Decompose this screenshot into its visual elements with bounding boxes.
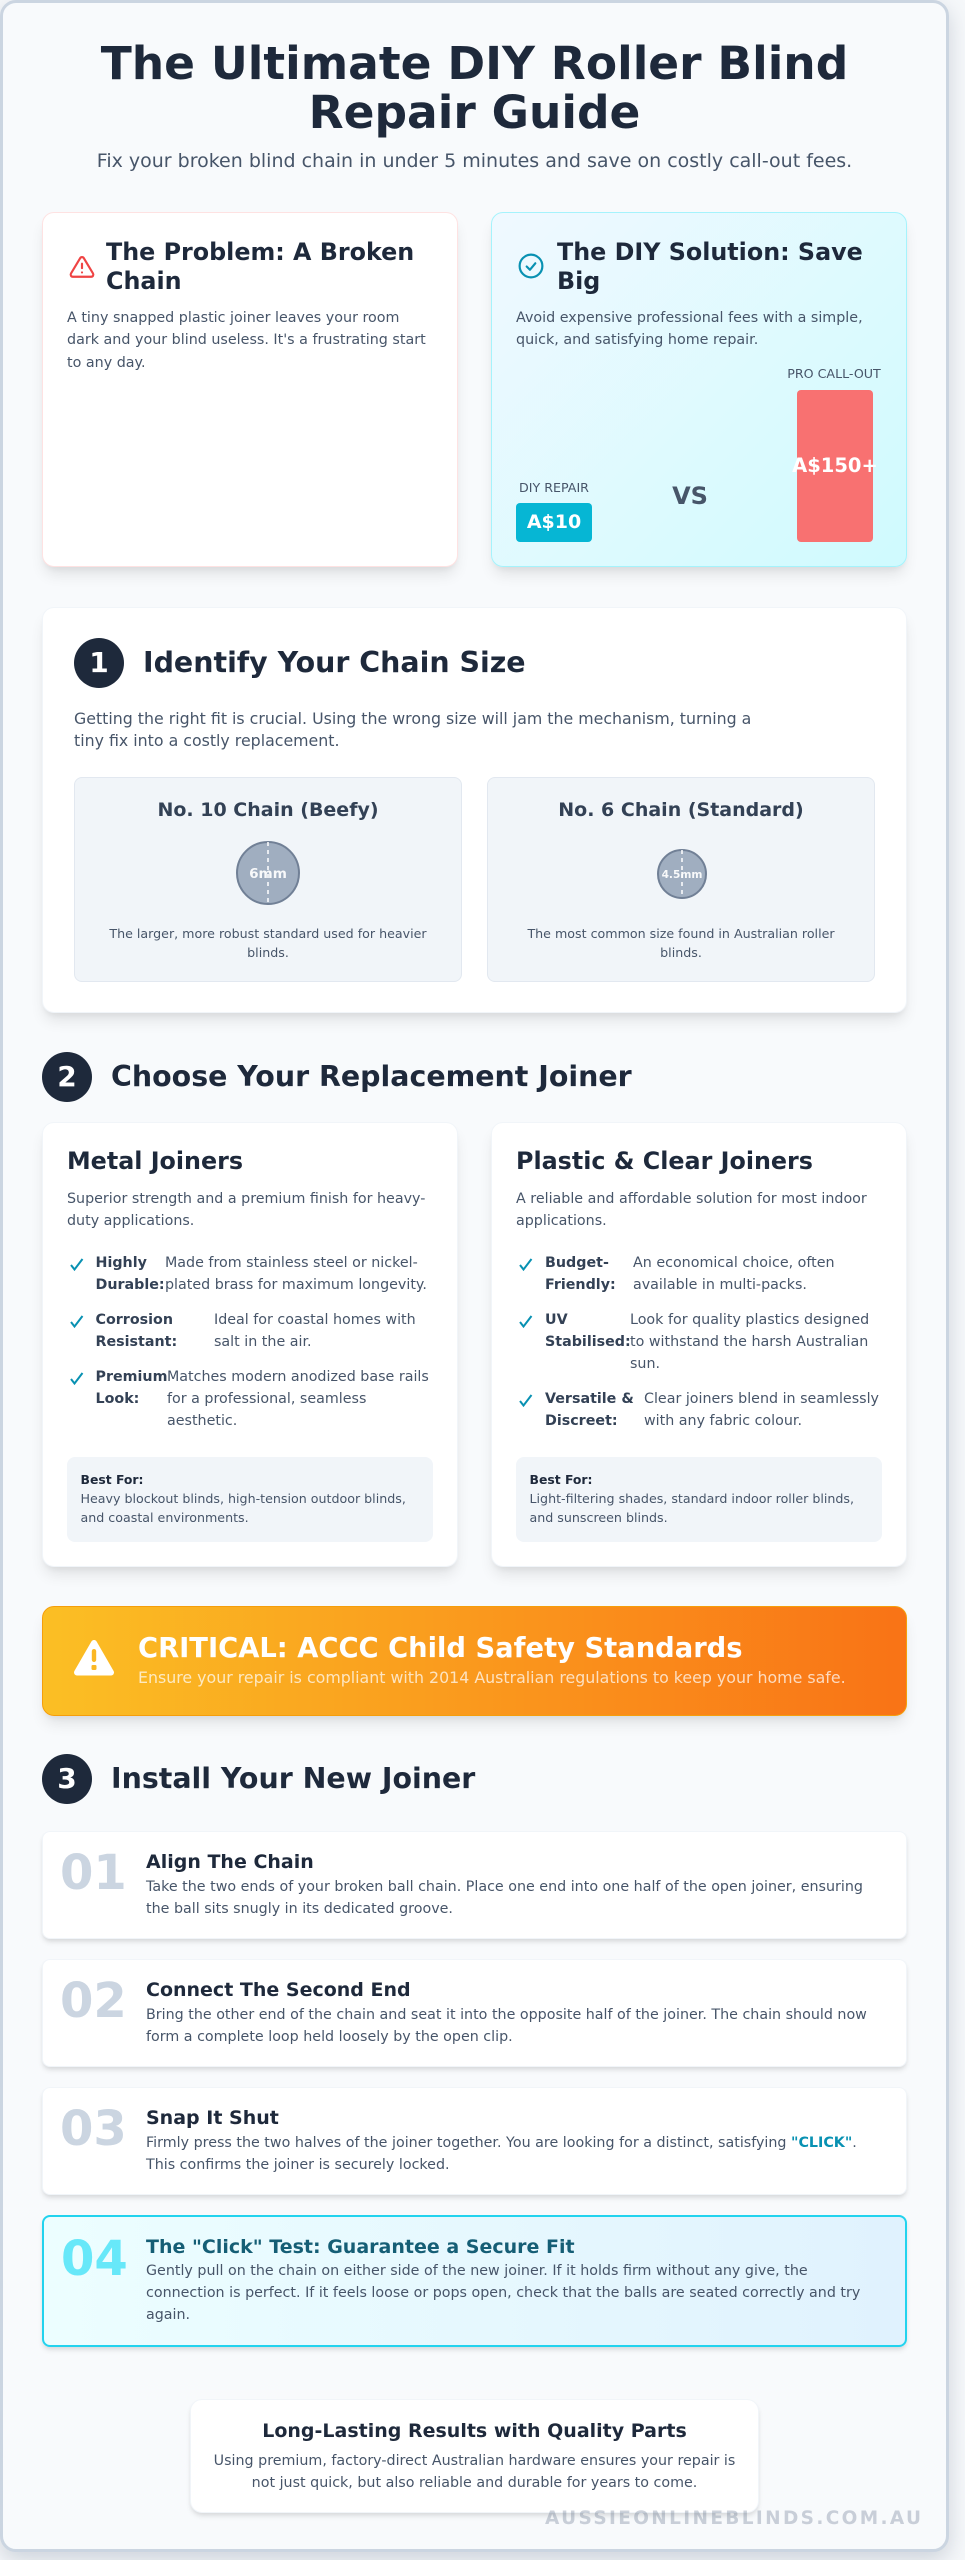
benefit: highly durable: Durable: bbox=[96, 1277, 165, 1293]
heading: align the chain: Align The Chain bbox=[146, 1851, 314, 1873]
icon: 4.5mm ball diagram: 4.5mm bbox=[662, 869, 702, 881]
heading: identify your chain size: Identify Your Chain Size bbox=[143, 646, 526, 679]
list: plastic benefits bbox=[519, 1255, 879, 1429]
benefit: uv stabilised: Stabilised: bbox=[545, 1334, 631, 1350]
benefit: uv stabilised: UV bbox=[545, 1312, 568, 1328]
benefit: highly durable: Highly bbox=[96, 1255, 147, 1271]
text: click test details: connection is perfect. If it feels loose or pops open, check that the balls are seated correctly and try bbox=[146, 2285, 860, 2301]
text: no. 10 description: The larger, more robust standard used for heavier bbox=[109, 926, 427, 941]
label: pro call-out: PRO CALL-OUT bbox=[787, 366, 881, 381]
text: plastic uses: Light-filtering shades, standard indoor roller blinds, bbox=[530, 1491, 854, 1506]
icon: check bbox=[70, 1315, 84, 1328]
number: 02: 02 bbox=[60, 1973, 127, 2029]
badge: number 3 bbox=[42, 1754, 92, 1804]
title: Repair Guide bbox=[309, 86, 640, 139]
text: compliance note: Ensure your repair is compliant with 2014 Australian regulations to keep your home safe. bbox=[138, 1668, 846, 1687]
label: DIY repair: DIY REPAIR bbox=[519, 480, 589, 495]
benefit: highly durable bbox=[96, 1255, 165, 1293]
text: metal intro bbox=[67, 1191, 425, 1229]
text: no. 10 description: blinds. bbox=[247, 945, 289, 960]
benefit: versatile and discreet bbox=[545, 1391, 634, 1429]
number: 04: 04 bbox=[61, 2231, 128, 2287]
heading: the problem: The Problem: A Broken bbox=[106, 238, 414, 266]
text: snap details: This confirms the joiner is securely locked. bbox=[146, 2157, 450, 2173]
benefit: budget friendly: Budget- bbox=[545, 1255, 609, 1271]
benefit: corrosion resistant: Corrosion bbox=[96, 1312, 173, 1328]
panel: metal joiners bbox=[42, 1122, 458, 1567]
text: corrosion detail: salt in the air. bbox=[214, 1334, 312, 1350]
heading: long-lasting results: Long-Lasting Results with Quality Parts bbox=[262, 2420, 687, 2442]
text: no. 6 description bbox=[527, 926, 835, 960]
icon: safety warning bbox=[74, 1640, 114, 1676]
heading: snap it shut: Snap It Shut bbox=[146, 2107, 279, 2129]
panel: number 6 chain bbox=[487, 777, 875, 982]
heading: no. 10 chain: No. 10 Chain (Beefy) bbox=[157, 799, 379, 821]
heading: ACCC child safety standards: CRITICAL: ACCC Child Safety Standards bbox=[138, 1633, 743, 1664]
text: snap details: Firmly press the two halves of the joiner together. You are looking for a distinct, satisfying "CLICK". bbox=[146, 2135, 857, 2151]
text: problem description: dark and your blind useless. It's a frustrating start bbox=[67, 332, 426, 348]
benefit: corrosion resistant bbox=[96, 1312, 177, 1350]
text: highly durable detail bbox=[165, 1255, 427, 1293]
text: align details: the ball sits snugly in its dedicated groove. bbox=[146, 1901, 453, 1917]
text: budget detail bbox=[633, 1255, 835, 1293]
icon: check bbox=[70, 1372, 84, 1385]
callout: plastic best for bbox=[516, 1457, 882, 1542]
bar: pro call-out cost: A$150+ bbox=[792, 454, 878, 477]
text: solution description: quick, and satisfying home repair. bbox=[516, 332, 758, 348]
text: solution description bbox=[516, 310, 863, 348]
text: no. 6 description: The most common size found in Australian roller bbox=[527, 926, 835, 941]
heading: the solution bbox=[557, 238, 863, 294]
text: snap details bbox=[146, 2132, 857, 2176]
heading: the problem bbox=[106, 238, 414, 294]
text: plastic uses bbox=[530, 1491, 854, 1525]
heading: click test: The "Click" Test: Guarantee a Secure Fit bbox=[146, 2236, 575, 2258]
watermark: website: AUSSIEONLINEBLINDS.COM.AU bbox=[545, 2508, 923, 2529]
icon: 6mm ball diagram bbox=[236, 841, 300, 905]
text: footer detail bbox=[191, 2450, 758, 2494]
text: plastic intro: A reliable and affordable solution for most indoor bbox=[516, 1191, 867, 1207]
label: best for: Best For: bbox=[80, 1472, 144, 1487]
icon: check bbox=[70, 1258, 84, 1271]
text: versatile detail: with any fabric colour. bbox=[644, 1413, 802, 1429]
number: 03: 03 bbox=[60, 2101, 127, 2157]
text: click test details: Gently pull on the chain on either side of the new joiner. If it holds firm without any give, the bbox=[146, 2263, 808, 2279]
text: click test details bbox=[146, 2260, 860, 2327]
panel: install step 02 bbox=[42, 1959, 907, 2067]
benefit: budget friendly: Friendly: bbox=[545, 1277, 616, 1293]
text: uv detail: Look for quality plastics designed bbox=[630, 1312, 869, 1328]
icon: check bbox=[519, 1258, 532, 1271]
text: metal uses: Heavy blockout blinds, high-tension outdoor blinds, bbox=[80, 1491, 406, 1506]
heading: choose replacement joiner: Choose Your Replacement Joiner bbox=[111, 1060, 632, 1093]
panel: install step 04 click test bbox=[42, 2215, 907, 2347]
text: problem description: A tiny snapped plastic joiner leaves your room bbox=[67, 310, 399, 326]
text: uv detail bbox=[630, 1312, 869, 1372]
text: no. 6 description: blinds. bbox=[660, 945, 702, 960]
text: uv detail: to withstand the harsh Australian bbox=[630, 1334, 868, 1350]
text: solution description: Avoid expensive professional fees with a simple, bbox=[516, 310, 863, 326]
panel: install step 01 bbox=[42, 1831, 907, 1939]
heading: the problem: Chain bbox=[106, 266, 182, 294]
panel: the DIY solution bbox=[491, 212, 907, 567]
bar: DIY repair cost bbox=[516, 503, 592, 542]
text: corrosion detail: Ideal for coastal homes with bbox=[214, 1312, 416, 1328]
text: versatile detail: Clear joiners blend in seamlessly bbox=[644, 1391, 879, 1407]
heading: the solution: The DIY Solution: Save bbox=[557, 238, 863, 266]
icon: 6mm ball diagram: 6mm bbox=[249, 866, 287, 882]
text: premium look detail: Matches modern anodized base rails bbox=[167, 1369, 429, 1385]
heading: install your new joiner: Install Your New Joiner bbox=[111, 1762, 475, 1795]
benefit: versatile and discreet: Versatile & bbox=[545, 1391, 634, 1407]
callout: metal best for bbox=[67, 1457, 433, 1542]
text: versatile detail bbox=[644, 1391, 879, 1429]
text: uv detail: sun. bbox=[630, 1356, 660, 1372]
benefit: versatile and discreet: Discreet: bbox=[545, 1413, 618, 1429]
text: chain size intro: tiny fix into a costly replacement. bbox=[74, 731, 340, 750]
bar: pro call-out cost bbox=[797, 390, 873, 542]
benefit: premium look: Premium bbox=[96, 1369, 167, 1385]
text: connect details: form a complete loop held loosely by the open clip. bbox=[146, 2029, 513, 2045]
text: premium look detail bbox=[167, 1369, 429, 1429]
text: metal intro: duty applications. bbox=[67, 1213, 194, 1229]
icon: warning triangle bbox=[70, 256, 94, 278]
text: no. 10 description bbox=[109, 926, 427, 960]
badge: number 3: 3 bbox=[57, 1762, 77, 1795]
text: metal intro: Superior strength and a premium finish for heavy- bbox=[67, 1191, 425, 1207]
number: 01: 01 bbox=[60, 1845, 127, 1901]
label: best for: Best For: bbox=[530, 1472, 592, 1487]
text: budget detail: available in multi-packs. bbox=[633, 1277, 807, 1293]
text: plastic intro bbox=[516, 1191, 867, 1229]
text: highly durable detail: plated brass for maximum longevity. bbox=[165, 1277, 427, 1293]
text: chain size intro bbox=[74, 709, 751, 750]
text: corrosion detail bbox=[214, 1312, 416, 1350]
list: metal benefits bbox=[70, 1255, 429, 1429]
icon: check bbox=[519, 1315, 532, 1328]
badge: number 1 bbox=[74, 638, 124, 688]
panel: footer quality note bbox=[190, 2399, 759, 2513]
benefit: corrosion resistant: Resistant: bbox=[96, 1334, 177, 1350]
heading: metal joiners: Metal Joiners bbox=[67, 1147, 243, 1175]
icon: check circle bbox=[518, 254, 544, 278]
text: align details bbox=[146, 1879, 863, 1917]
heading: plastic and clear joiners: Plastic & Clear Joiners bbox=[516, 1147, 813, 1175]
text: align details: Take the two ends of your broken ball chain. Place one end into one half of the open joiner, ensuring bbox=[146, 1879, 863, 1895]
benefit: premium look: Look: bbox=[96, 1391, 139, 1407]
icon: check bbox=[519, 1394, 532, 1407]
text: problem description: to any day. bbox=[67, 355, 146, 371]
subtitle: Fix your broken blind chain in under 5 minutes and save on costly call-out fees. bbox=[97, 150, 852, 172]
badge: number 2 bbox=[42, 1052, 92, 1102]
benefit: premium look bbox=[96, 1369, 167, 1407]
panel: number 10 chain bbox=[74, 777, 462, 982]
heading: connect the second end: Connect The Second End bbox=[146, 1979, 411, 2001]
text: metal uses: and coastal environments. bbox=[80, 1510, 249, 1525]
text: chain size intro: Getting the right fit is crucial. Using the wrong size will jam the mechanism, turning a bbox=[74, 709, 751, 728]
text: metal uses bbox=[80, 1491, 406, 1525]
text: click test details: again. bbox=[146, 2307, 190, 2323]
text: plastic intro: applications. bbox=[516, 1213, 607, 1229]
badge: number 1: 1 bbox=[89, 646, 109, 679]
callout: child safety alert bbox=[42, 1606, 907, 1716]
bar: DIY repair cost: A$10 bbox=[527, 511, 581, 533]
icon: 4.5mm ball diagram bbox=[657, 849, 707, 899]
heading: the solution: Big bbox=[557, 266, 600, 294]
benefit: uv stabilised bbox=[545, 1312, 631, 1350]
heading: no. 6 chain: No. 6 Chain (Standard) bbox=[558, 799, 804, 821]
panel: install step 03 bbox=[42, 2087, 907, 2195]
panel: plastic and clear joiners bbox=[491, 1122, 907, 1567]
panel: the problem bbox=[42, 212, 458, 567]
text: connect details bbox=[146, 2007, 867, 2045]
text: footer detail: not just quick, but also reliable and durable for years to come. bbox=[252, 2475, 697, 2491]
text: highly durable detail: Made from stainless steel or nickel- bbox=[165, 1255, 418, 1271]
text: budget detail: An economical choice, often bbox=[633, 1255, 835, 1271]
text: premium look detail: aesthetic. bbox=[167, 1413, 237, 1429]
title bbox=[100, 37, 848, 139]
benefit: budget friendly bbox=[545, 1255, 616, 1293]
text: versus: VS bbox=[672, 482, 708, 510]
text: plastic uses: and sunscreen blinds. bbox=[530, 1510, 668, 1525]
text: premium look detail: for a professional, seamless bbox=[167, 1391, 366, 1407]
badge: number 2: 2 bbox=[57, 1060, 77, 1093]
title: The Ultimate DIY Roller Blind bbox=[101, 37, 848, 90]
text: connect details: Bring the other end of the chain and seat it into the opposite half of the joiner. The chain should now bbox=[146, 2007, 867, 2023]
text: problem description bbox=[67, 310, 426, 371]
panel: step 1 identify chain size bbox=[42, 607, 907, 1013]
text: footer detail: Using premium, factory-direct Australian hardware ensures your repair is bbox=[214, 2453, 735, 2469]
